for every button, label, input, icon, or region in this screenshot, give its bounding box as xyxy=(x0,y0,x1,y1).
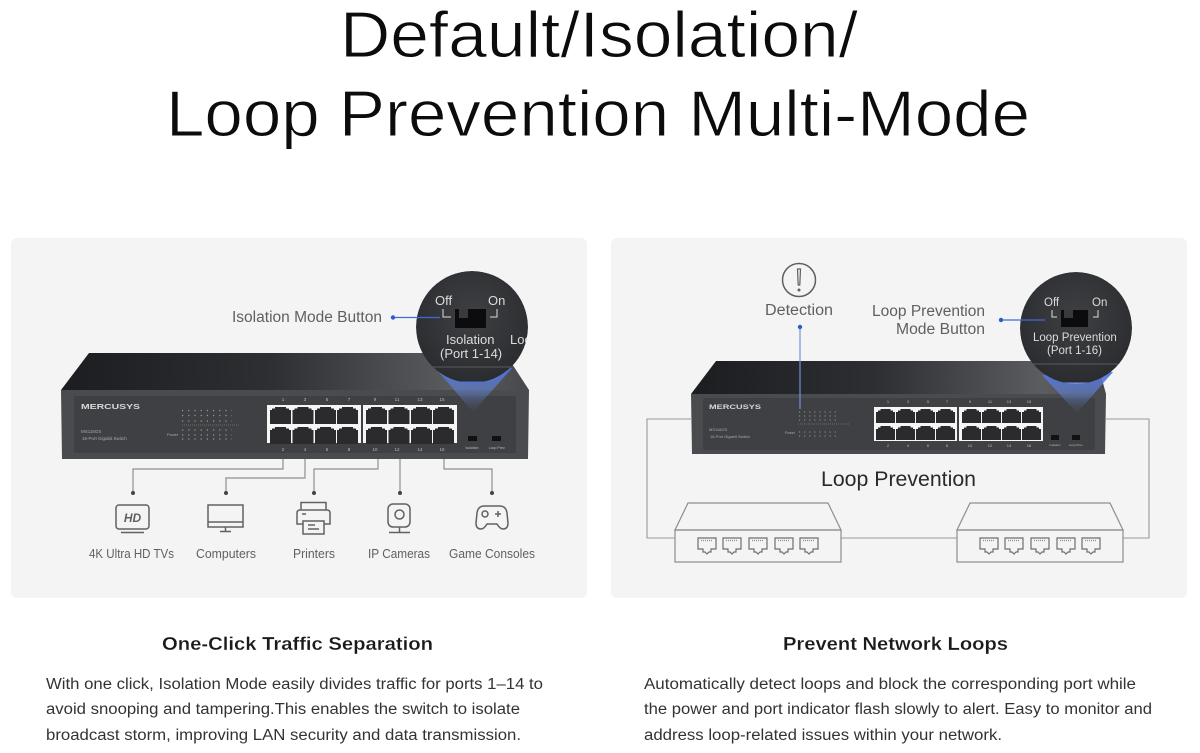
text block: isolation description: avoid snooping and tampering.This enables the switch to isolate xyxy=(46,701,520,718)
callout: detection xyxy=(765,264,833,409)
switch: loop panel: Isolation xyxy=(1049,443,1061,447)
switch: isolation panel: 5 xyxy=(326,397,329,402)
icon: 4K TV: HD xyxy=(124,511,141,525)
text block: isolation description: With one click, Isolation Mode easily divides traffic for ports 1–14 to xyxy=(46,676,543,693)
device: right network switch xyxy=(957,503,1123,562)
switch: isolation panel: 14 xyxy=(417,447,423,452)
panel: isolation mode xyxy=(11,238,587,598)
switch: isolation panel: 1 xyxy=(282,397,285,402)
device labels: IP Cameras xyxy=(368,547,430,561)
switch: isolation panel: 3 xyxy=(304,397,307,402)
text block: isolation description xyxy=(46,676,543,744)
switch: isolation panel: Isolation xyxy=(465,446,479,450)
switch: loop panel: 10 xyxy=(968,443,973,448)
heading: prevent network loops: Prevent Network Loops xyxy=(783,633,1008,654)
text block: loop description: Automatically detect loops and block the corresponding port while xyxy=(644,676,1136,693)
magnifier: loop prevention switch: On xyxy=(1092,297,1107,309)
switch: isolation panel: MS116GS xyxy=(81,429,101,434)
switch: isolation panel: 16-Port Gigabit Switch xyxy=(82,436,127,441)
switch: loop panel: 9 xyxy=(969,399,972,404)
magnifier: isolation switch xyxy=(416,271,539,383)
magnifier: isolation switch: Isolation xyxy=(446,332,494,347)
switch: isolation panel xyxy=(61,353,529,459)
switch: loop panel: 16 xyxy=(1027,443,1032,448)
icon: computer xyxy=(208,505,243,532)
title: Default/Isolation/ xyxy=(340,0,859,71)
switch: isolation panel: MERCUSYS xyxy=(81,402,140,411)
connector lines from ports to devices xyxy=(131,455,494,495)
switch: loop panel: 5 xyxy=(927,399,930,404)
switch: loop panel: 14 xyxy=(1007,443,1012,448)
switch: loop panel: 7 xyxy=(946,399,949,404)
switch: loop panel: MS116GS xyxy=(709,427,727,432)
callout: loop prevention mode button xyxy=(872,303,1045,338)
callout: detection: Detection xyxy=(765,302,833,319)
switch: isolation panel: 13 xyxy=(417,397,423,402)
switch: isolation panel: 7 xyxy=(348,397,351,402)
switch: isolation panel: 6 xyxy=(326,447,329,452)
magnifier: loop prevention switch: Off xyxy=(1044,297,1060,309)
title: Loop Prevention Multi-Mode xyxy=(166,77,1030,150)
switch: loop panel: MERCUSYS xyxy=(709,404,762,411)
text block: loop description xyxy=(644,676,1152,744)
switch: loop panel: Power xyxy=(785,431,796,435)
device labels xyxy=(89,547,535,561)
switch: isolation panel: 11 xyxy=(395,397,400,402)
icon: IP camera xyxy=(388,504,410,532)
switch: loop panel: 13 xyxy=(1007,399,1012,404)
switch: isolation panel: 8 xyxy=(348,447,351,452)
title xyxy=(166,0,1030,150)
magnifier: isolation switch: Loop xyxy=(510,332,539,347)
magnifier: isolation switch: On xyxy=(488,293,505,308)
icon: game console xyxy=(476,506,508,529)
highlight cone xyxy=(437,368,512,412)
device labels: Computers xyxy=(196,547,256,561)
switch: loop panel: 2 xyxy=(887,443,890,448)
magnifier: isolation switch: (Port 1-14) xyxy=(440,346,502,361)
loop cabling xyxy=(647,419,1149,538)
highlight cone xyxy=(1042,372,1113,413)
magnifier: loop prevention switch: (Port 1-16) xyxy=(1047,345,1102,357)
device labels: Game Consoles xyxy=(449,547,535,561)
panel: loop prevention xyxy=(611,238,1187,598)
icon: printer xyxy=(297,502,330,534)
switch: loop panel: 4 xyxy=(907,443,910,448)
callout: loop prevention mode button: Loop Prevention xyxy=(872,303,985,320)
switch: loop panel: 16-Port Gigabit Switch xyxy=(710,434,750,439)
switch: loop panel: 11 xyxy=(988,399,993,404)
text block: isolation description: broadcast storm, improving LAN security and data transmission. xyxy=(46,727,521,744)
callout: isolation mode button: Isolation Mode Button xyxy=(232,309,382,326)
switch: loop panel: 8 xyxy=(946,443,949,448)
icon: 4K TV xyxy=(116,505,149,532)
switch: isolation panel: 9 xyxy=(374,397,377,402)
magnifier: loop prevention switch xyxy=(1020,272,1133,384)
switch: loop panel: 1 xyxy=(887,399,890,404)
text block: loop description: address loop-related issues within your network. xyxy=(644,727,1002,744)
device labels: 4K Ultra HD TVs xyxy=(89,547,174,561)
switch: isolation panel: 4 xyxy=(304,447,307,452)
switch: loop panel: Loop Prev. xyxy=(1069,443,1083,447)
magnifier: isolation switch: Off xyxy=(435,293,452,308)
switch: loop panel: 3 xyxy=(907,399,910,404)
switch: loop panel: 12 xyxy=(988,443,993,448)
switch: isolation panel: 16 xyxy=(439,447,445,452)
text block: loop description: the power and port indicator flash slowly to alert. Easy to monitor and xyxy=(644,701,1152,718)
switch: loop panel: 15 xyxy=(1027,399,1032,404)
heading: one-click traffic separation: One-Click Traffic Separation xyxy=(162,633,433,654)
device: left network switch xyxy=(675,503,841,562)
magnifier: loop prevention switch: Loop Prevention xyxy=(1033,332,1117,344)
switch: loop panel: 6 xyxy=(927,443,930,448)
switch: isolation panel: 15 xyxy=(439,397,445,402)
switch: isolation panel: Loop Prev. xyxy=(489,446,505,450)
label: loop prevention: Loop Prevention xyxy=(821,468,976,491)
switch: isolation panel: Power xyxy=(167,432,179,437)
switch: isolation panel: 2 xyxy=(282,447,285,452)
switch: isolation panel: 12 xyxy=(394,447,400,452)
callout: loop prevention mode button: Mode Button xyxy=(896,321,985,338)
switch: loop panel xyxy=(691,361,1106,454)
switch: isolation panel: 10 xyxy=(372,447,378,452)
device labels: Printers xyxy=(293,547,335,561)
